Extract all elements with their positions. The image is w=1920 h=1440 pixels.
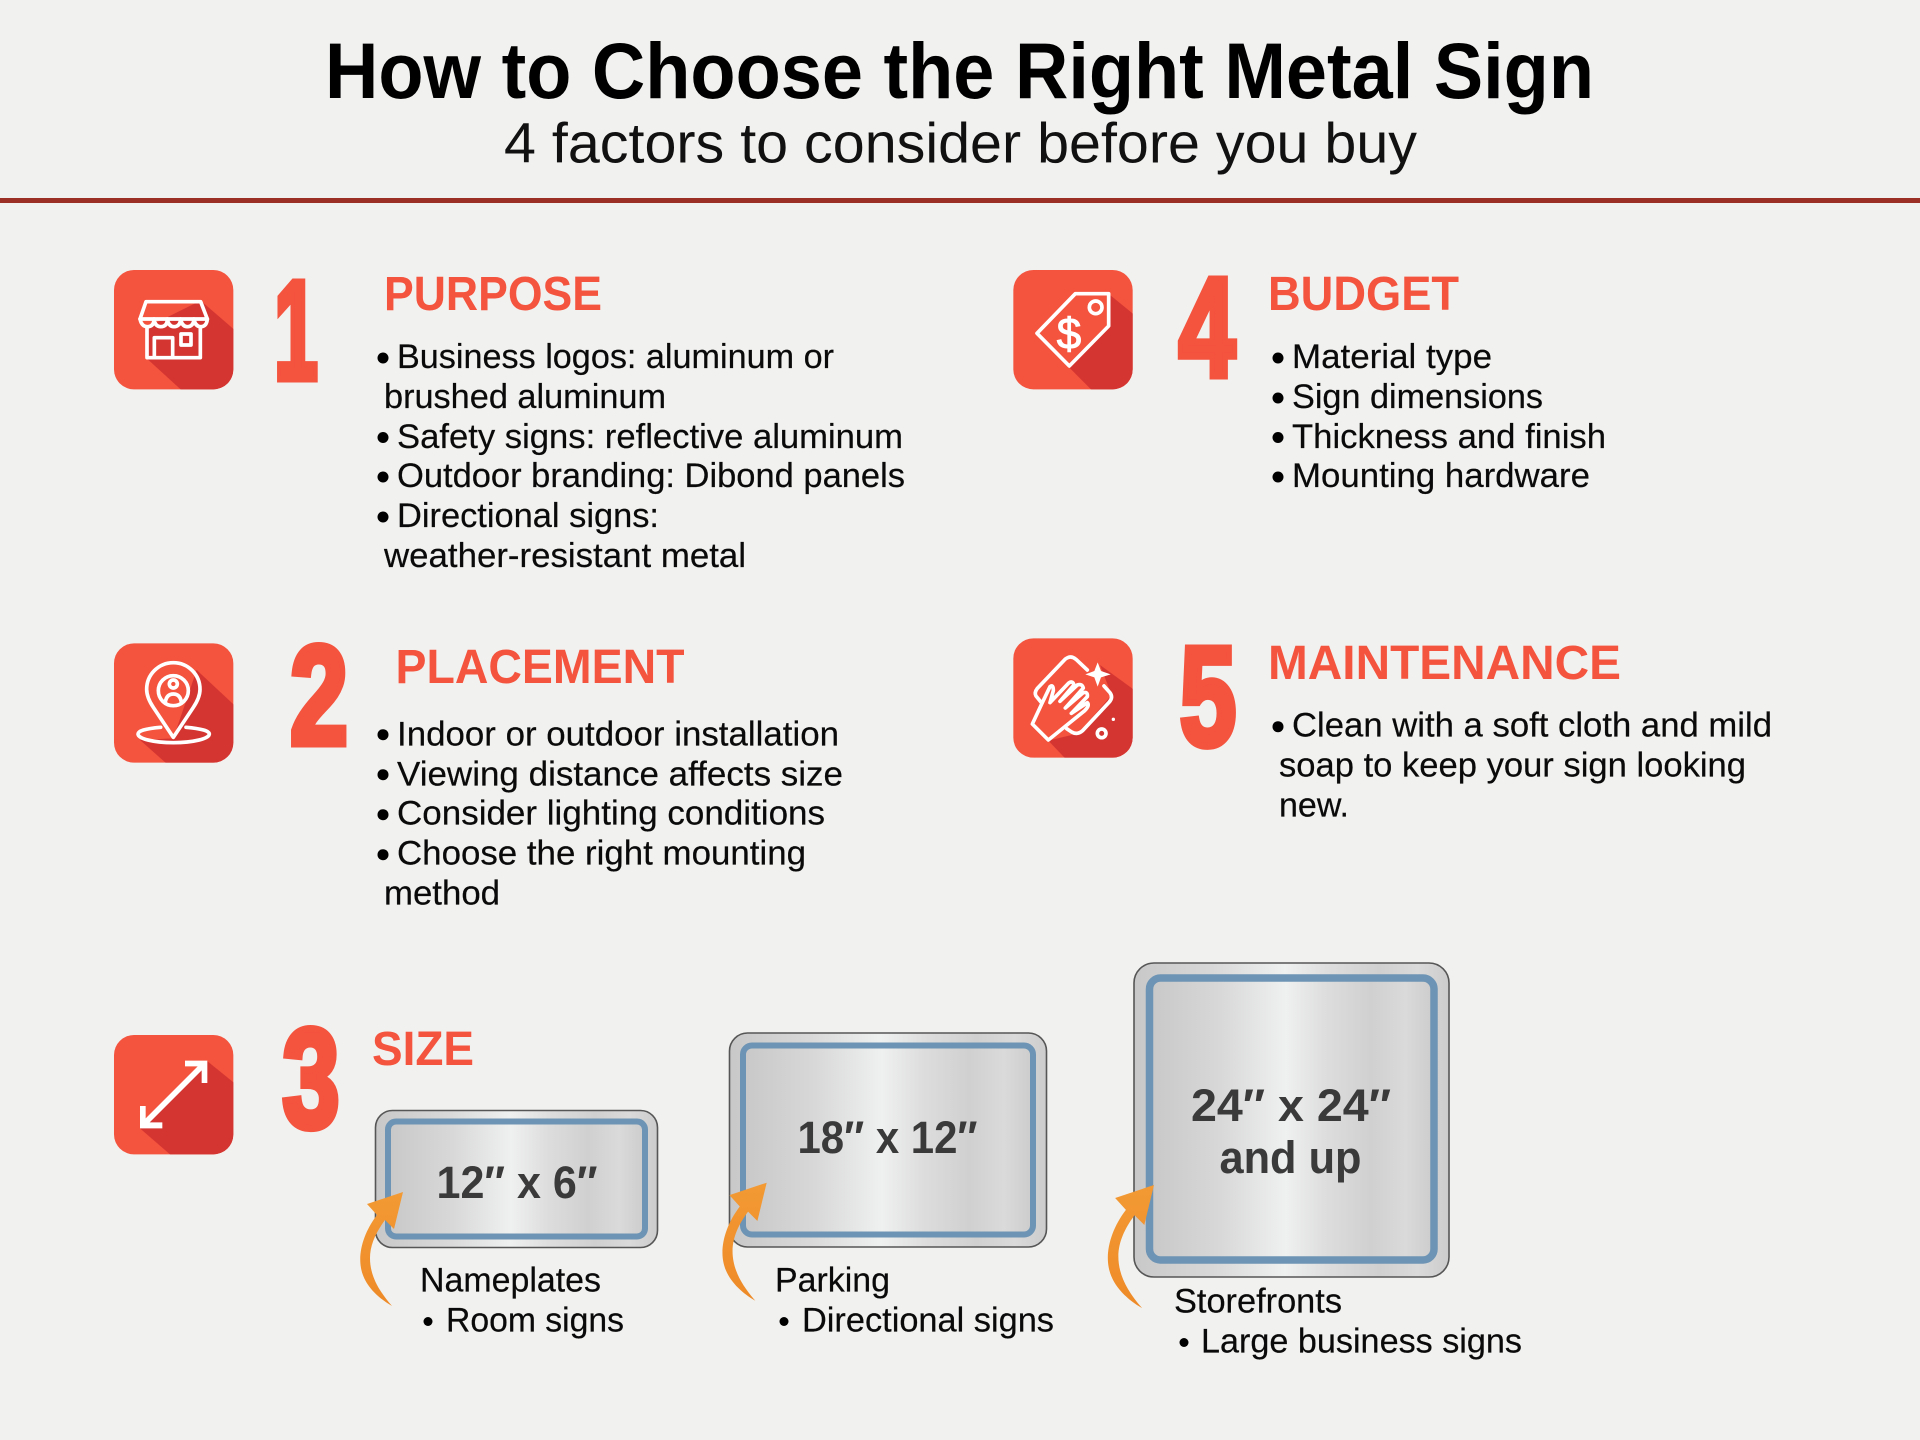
arrow: parking — [722, 1183, 767, 1301]
caption: nameplates: Room signs — [446, 1302, 624, 1340]
number 1: 1 — [274, 253, 318, 410]
caption: parking — [775, 1262, 1054, 1340]
bullet list: placement: Viewing distance affects size — [397, 756, 843, 794]
sign: 12 x 6 — [376, 1110, 658, 1248]
paragraph: maintenance: new. — [1279, 787, 1349, 825]
sign: 18 x 12 — [730, 1033, 1046, 1247]
panel: size — [114, 963, 1522, 1360]
bullet list: placement: Indoor or outdoor installation — [397, 716, 839, 754]
bullet list: budget: Mounting hardware — [1292, 457, 1590, 495]
paragraph: maintenance — [1272, 707, 1772, 825]
bullet list: purpose: weather-resistant metal — [383, 537, 746, 575]
bullet list: placement: Consider lighting conditions — [397, 795, 825, 833]
number 2: 2 — [290, 618, 348, 775]
bullet list: purpose: brushed aluminum — [384, 378, 666, 416]
number 4: 4 — [1179, 250, 1235, 407]
caption: storefronts: Large business signs — [1201, 1322, 1522, 1360]
sign: 24 x 24 — [1134, 963, 1449, 1277]
bullet list: purpose: Safety signs: reflective aluminum — [397, 418, 903, 456]
number 5: 5 — [1180, 619, 1236, 776]
heading: purpose: PURPOSE — [384, 268, 602, 321]
panel: budget — [1013, 250, 1606, 495]
arrow: storefronts — [1108, 1185, 1154, 1308]
heading: size: SIZE — [372, 1023, 474, 1076]
bullet list: purpose: Outdoor branding: Dibond panels — [397, 457, 905, 495]
bullet list: purpose: Business logos: aluminum or — [397, 338, 834, 376]
bullet list: purpose — [378, 338, 905, 575]
bullet list: placement: Choose the right mounting — [397, 835, 806, 873]
arrow: nameplates — [360, 1192, 403, 1306]
bullet list: placement — [378, 716, 843, 913]
bullet list: budget: Sign dimensions — [1292, 378, 1543, 416]
panel: placement — [114, 642, 842, 905]
paragraph: maintenance: Clean with a soft cloth and mild — [1292, 707, 1772, 745]
bullet list: budget — [1272, 338, 1606, 495]
panel: purpose — [114, 253, 905, 575]
icon: hand wiping with cloth — [1013, 638, 1137, 762]
heading: maintenance: MAINTENANCE — [1268, 637, 1621, 690]
number 3: 3 — [282, 1000, 340, 1158]
icon: resize arrow — [114, 1035, 237, 1157]
title: How to Choose the Right Metal Sign — [325, 26, 1594, 115]
caption: nameplates: Nameplates — [420, 1262, 601, 1300]
icon: price tag: $ — [1057, 310, 1081, 359]
icon: price tag — [1013, 270, 1137, 393]
heading: placement: PLACEMENT — [396, 641, 684, 694]
bullet list: placement: method — [384, 875, 500, 913]
paragraph: maintenance: soap to keep your sign looking — [1279, 747, 1746, 785]
caption: nameplates — [420, 1262, 624, 1340]
bullet list: budget: Thickness and finish — [1292, 418, 1606, 456]
sign: 24 x 24: and up — [1220, 1132, 1362, 1183]
sign: 18 x 12: 18″ x 12″ — [798, 1112, 978, 1163]
sign: 12 x 6: 12″ x 6″ — [436, 1157, 598, 1208]
sign: 24 x 24: 24″ x 24″ — [1191, 1080, 1391, 1131]
bullet list: budget: Material type — [1292, 338, 1492, 376]
icon: storefront — [114, 270, 237, 393]
bullet list: purpose: Directional signs: — [397, 497, 659, 535]
panel: maintenance — [1013, 638, 1770, 817]
caption: parking: Parking — [775, 1262, 890, 1300]
icon: location pin — [114, 643, 237, 767]
caption: storefronts — [1174, 1282, 1522, 1360]
heading: budget: BUDGET — [1268, 268, 1459, 321]
subtitle: 4 factors to consider before you buy — [504, 112, 1417, 176]
caption: storefronts: Storefronts — [1174, 1282, 1342, 1320]
caption: parking: Directional signs — [802, 1302, 1054, 1340]
